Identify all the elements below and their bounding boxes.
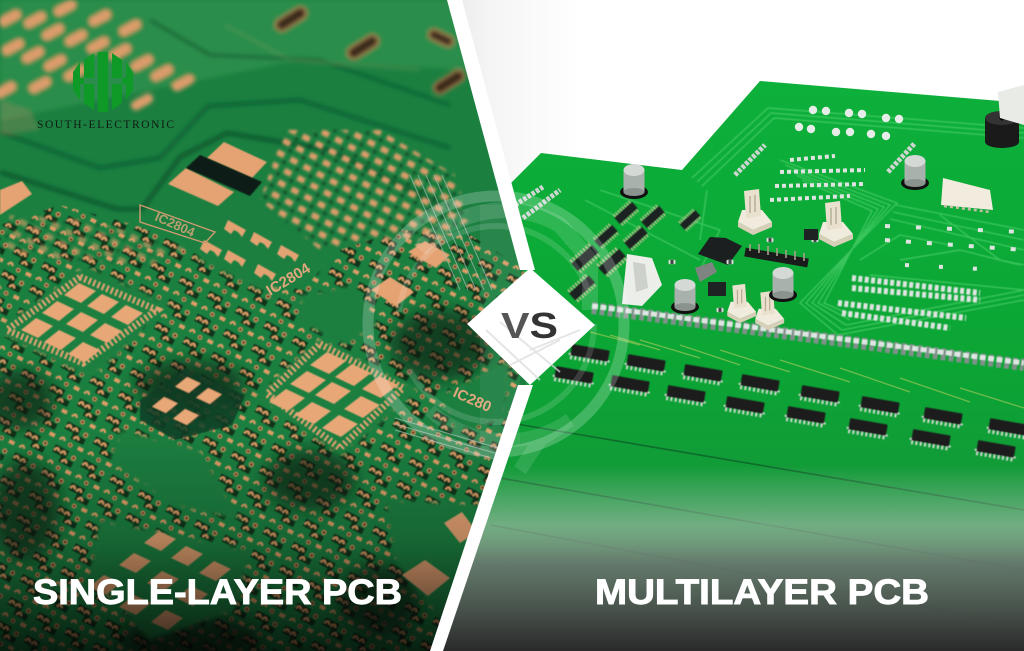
blurred pads top-left (0, 0, 196, 112)
board traces (585, 108, 1024, 335)
small passive parts (668, 229, 818, 312)
white connectors (727, 189, 853, 330)
logo mark (73, 52, 133, 112)
bottom darkening on left panel (0, 452, 494, 651)
green board patches between pads (3, 253, 512, 640)
dense pad field (0, 205, 525, 651)
long silver pin row (592, 306, 1024, 365)
silkscreen labels: IC2804 (153, 209, 198, 240)
heading: single-layer PCB: SINGLE-LAYER PCB (33, 573, 402, 612)
SMD resistor arrays right (838, 278, 980, 328)
surface-mount ICs lower rows (554, 344, 1024, 460)
large white connector (622, 254, 662, 306)
white top-right connector (998, 85, 1024, 125)
chip land pattern centre (267, 344, 403, 448)
watermark ring logo (368, 196, 624, 470)
panel: multilayer PCB photo (433, 0, 1024, 651)
SMD clusters (770, 156, 1024, 270)
black gap between large pads (186, 155, 262, 196)
VS badge (467, 268, 595, 385)
silver fine traces (395, 175, 505, 462)
silkscreen labels (153, 209, 494, 416)
board base (0, 0, 530, 651)
silkscreen labels: IC2804 (263, 260, 314, 299)
central processor chip (698, 237, 742, 265)
white divider stroke (430, 0, 535, 651)
lower board layers (490, 424, 1024, 552)
resistor strips (515, 143, 915, 218)
electrolytic capacitors (620, 155, 929, 314)
black buzzer (985, 111, 1019, 148)
logo wordmark: SOUTH-ELECTRONIC (37, 119, 174, 131)
small copper U pads (200, 220, 299, 281)
blurred top area (0, 0, 470, 209)
lower board grey fade (433, 465, 1024, 651)
white wide connector (941, 178, 993, 212)
pin header (745, 244, 808, 263)
surface-mount ICs upper group (568, 201, 701, 302)
four-pad land pattern (140, 368, 245, 440)
silkscreen labels: IC280 (450, 384, 494, 416)
lower land pattern (89, 531, 231, 630)
green board outline (440, 81, 1024, 651)
panel: single-layer PCB photo (0, 0, 530, 651)
VS badge: VS (501, 305, 558, 346)
studio background (462, 0, 527, 385)
IC row traces (590, 332, 1024, 408)
heading: multilayer PCB: MULTILAYER PCB (595, 573, 929, 612)
chip land pattern left (7, 277, 157, 363)
white solder pads cluster top (795, 106, 903, 140)
large copper pads (0, 142, 477, 596)
dark oval slots top-right (273, 5, 467, 96)
logo: South-Electronic (37, 52, 174, 131)
dark shading where pads are dense (0, 310, 490, 651)
